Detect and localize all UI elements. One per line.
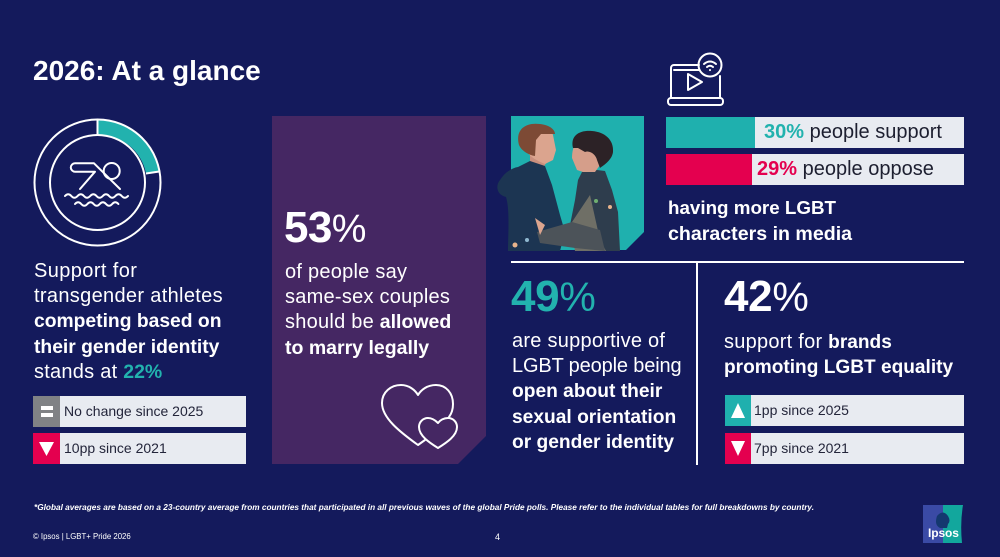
icon: hearts xyxy=(381,384,458,449)
text: brands promoting equality: promoting LGBT equality xyxy=(724,357,953,378)
bar: 29% oppose: 29% people oppose xyxy=(757,158,934,180)
text: LGBT characters in media: characters in media xyxy=(668,223,852,245)
footer source: © Ipsos | LGBT+ Pride 2026 xyxy=(33,532,131,541)
text: LGBT characters in media xyxy=(668,197,852,245)
pill: 1pp since 2025 xyxy=(725,395,964,426)
text: brands promoting equality xyxy=(724,331,953,378)
text: supportive of being open: are supportive of xyxy=(512,330,665,352)
text: supportive of being open: or gender identity xyxy=(512,432,674,453)
text: supportive of being open: LGBT people being xyxy=(512,355,681,377)
text: marriage statement: to marry legally xyxy=(285,337,429,359)
text: marriage statement xyxy=(285,261,451,359)
pill: no change since 2025 xyxy=(33,396,246,427)
text: brands promoting equality: support for brands xyxy=(724,331,892,353)
text: marriage statement: should be allowed xyxy=(285,311,451,333)
text: transgender athletes support: transgender athletes xyxy=(34,285,223,307)
page number: 4 xyxy=(495,532,500,542)
icon: laptop with wifi and play xyxy=(667,52,724,106)
text: supportive of being open: sexual orientation xyxy=(512,407,676,428)
text: supportive of being open: open about their xyxy=(512,381,662,402)
logo: Ipsos xyxy=(923,505,963,543)
pill: 7pp since 2021: 7pp since 2021 xyxy=(754,440,849,456)
photo: two men embracing on teal panel xyxy=(498,116,644,251)
pill: 10pp since 2021 xyxy=(33,433,246,464)
text: transgender athletes support: competing based on xyxy=(34,311,221,332)
bar: 30% support: 30% people support xyxy=(764,121,942,143)
stat: 49%: 49% xyxy=(511,272,596,321)
pill: 1pp since 2025: 1pp since 2025 xyxy=(754,402,849,418)
text: marriage statement: same-sex couples xyxy=(285,286,450,308)
text: transgender athletes support: Support for xyxy=(34,260,137,282)
pill: no change since 2025: No change since 2025 xyxy=(64,403,203,419)
icon: swimmer donut chart 22% xyxy=(34,118,162,246)
bar: 29% oppose xyxy=(666,154,964,185)
text: LGBT characters in media: having more LGBT xyxy=(668,197,836,218)
text: transgender athletes support: stands at 22% xyxy=(34,361,162,383)
text: marriage statement: of people say xyxy=(285,261,407,283)
stat: 42%: 42% xyxy=(724,272,808,321)
text: transgender athletes support: their gender identity xyxy=(34,337,219,358)
panel: same-sex marriage xyxy=(272,116,486,464)
text: transgender athletes support xyxy=(34,260,223,383)
title: 2026: At a glance xyxy=(33,55,261,86)
pill: 7pp since 2021 xyxy=(725,433,964,464)
logo: Ipsos: Ipsos xyxy=(928,526,959,540)
text: supportive of being open xyxy=(512,330,681,453)
footnote: *Global averages are based on a 23-country average from countries that participated in all previous waves of the global Pride polls. Please refer to the individual tables for full breakdowns by country. xyxy=(34,503,814,512)
pill: 10pp since 2021: 10pp since 2021 xyxy=(64,440,167,456)
stat: 53%: 53% xyxy=(284,203,366,252)
bar: 30% support xyxy=(666,117,964,148)
